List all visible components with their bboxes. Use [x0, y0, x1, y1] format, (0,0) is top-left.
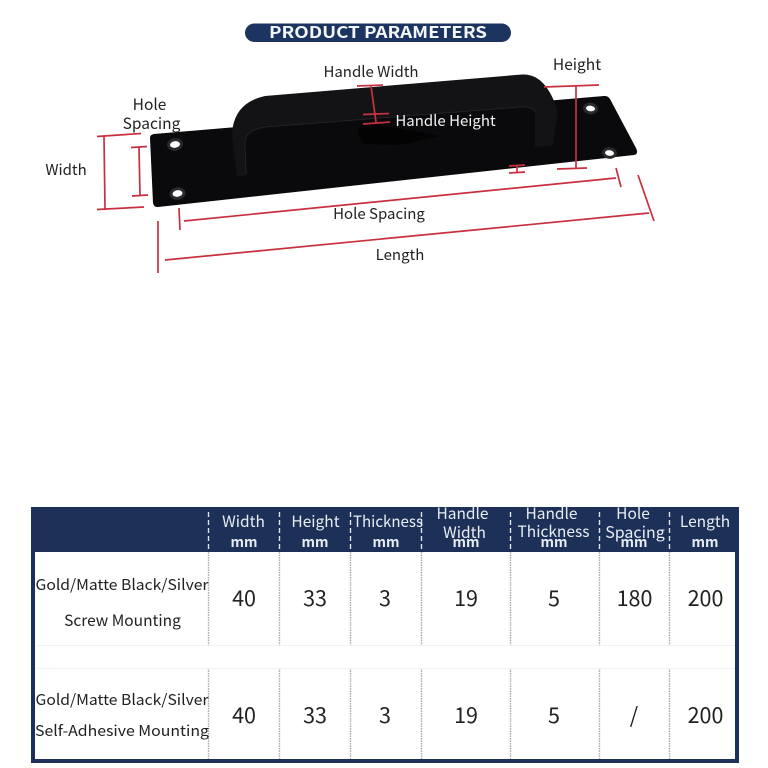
- header labels: Height: [291, 510, 340, 532]
- row 1: screw mounting: 200: [688, 582, 723, 613]
- label: hole spacing, plate end: Hole: [133, 93, 166, 115]
- red dimension lines: [97, 85, 654, 273]
- row 2: self-adhesive mounting: 5: [548, 699, 560, 730]
- header labels: Thickness: [518, 520, 589, 542]
- row 1: screw mounting: 33: [303, 582, 327, 613]
- row 1: screw mounting: 3: [379, 582, 391, 613]
- row 1: screw mounting: 19: [454, 582, 478, 613]
- header column dividers: [208, 512, 670, 551]
- parameters table: [31, 502, 739, 763]
- table frame and header band: [31, 507, 739, 763]
- header labels: Thickness: [353, 510, 423, 532]
- header labels: Length: [680, 510, 730, 532]
- header units: mm: [372, 532, 400, 552]
- grip inner edge highlight: [245, 107, 535, 174]
- label: hole spacing, plate end: Spacing: [123, 112, 181, 134]
- plate holes: [168, 103, 616, 199]
- label: width: Width: [45, 159, 87, 180]
- header units: mm: [540, 532, 568, 552]
- handle grip: [232, 74, 558, 177]
- header units: mm: [692, 532, 718, 552]
- row 2: self-adhesive mounting: 40: [232, 699, 256, 730]
- header labels: Width: [222, 510, 265, 532]
- row 1: screw mounting: 180: [617, 582, 652, 613]
- row 2: self-adhesive mounting: /: [630, 699, 639, 730]
- row 2: self-adhesive mounting: 19: [454, 699, 478, 730]
- header labels: Handle: [436, 502, 489, 524]
- label: handle width: Handle Width: [323, 61, 419, 82]
- label: height: Height: [553, 53, 601, 75]
- title: PRODUCT PARAMETERS: [269, 19, 487, 43]
- body column dividers: [208, 552, 670, 759]
- row 2: self-adhesive mounting: 200: [688, 699, 723, 730]
- header units: mm: [302, 532, 328, 552]
- header units: [230, 532, 718, 552]
- row 2: self-adhesive mounting: 3: [379, 699, 391, 730]
- row 1: screw mounting: 40: [232, 582, 256, 613]
- header labels: Width: [443, 521, 486, 543]
- row 1: screw mounting: Gold/Matte Black/Silver: [36, 574, 209, 595]
- header labels: Hole: [616, 502, 650, 524]
- row 2: self-adhesive mounting: Self-Adhesive Mounting: [35, 720, 210, 741]
- header labels: [222, 502, 730, 543]
- row 2: self-adhesive mounting: [35, 689, 723, 741]
- row 2: self-adhesive mounting: 33: [303, 699, 327, 730]
- handle shadow: [358, 124, 440, 145]
- product photo: black pull handle: [150, 74, 637, 207]
- header units: mm: [620, 532, 648, 552]
- row 1: screw mounting: 5: [548, 582, 560, 613]
- header units: mm: [452, 532, 480, 552]
- label: handle height: Handle Height: [395, 110, 496, 131]
- handle base plate: [150, 96, 637, 207]
- label: length: Length: [376, 244, 424, 265]
- header units: mm: [230, 532, 258, 552]
- header labels: Handle: [525, 502, 578, 524]
- header labels: Spacing: [605, 519, 665, 543]
- row 2: self-adhesive mounting: Gold/Matte Black/Silver: [36, 689, 209, 710]
- row 1: screw mounting: [36, 574, 723, 631]
- row 1: screw mounting: Screw Mounting: [64, 609, 181, 631]
- label: hole spacing, along plate: Hole Spacing: [333, 203, 425, 224]
- row separators: [37, 646, 735, 668]
- label: hole spacing, plate end: [123, 93, 181, 134]
